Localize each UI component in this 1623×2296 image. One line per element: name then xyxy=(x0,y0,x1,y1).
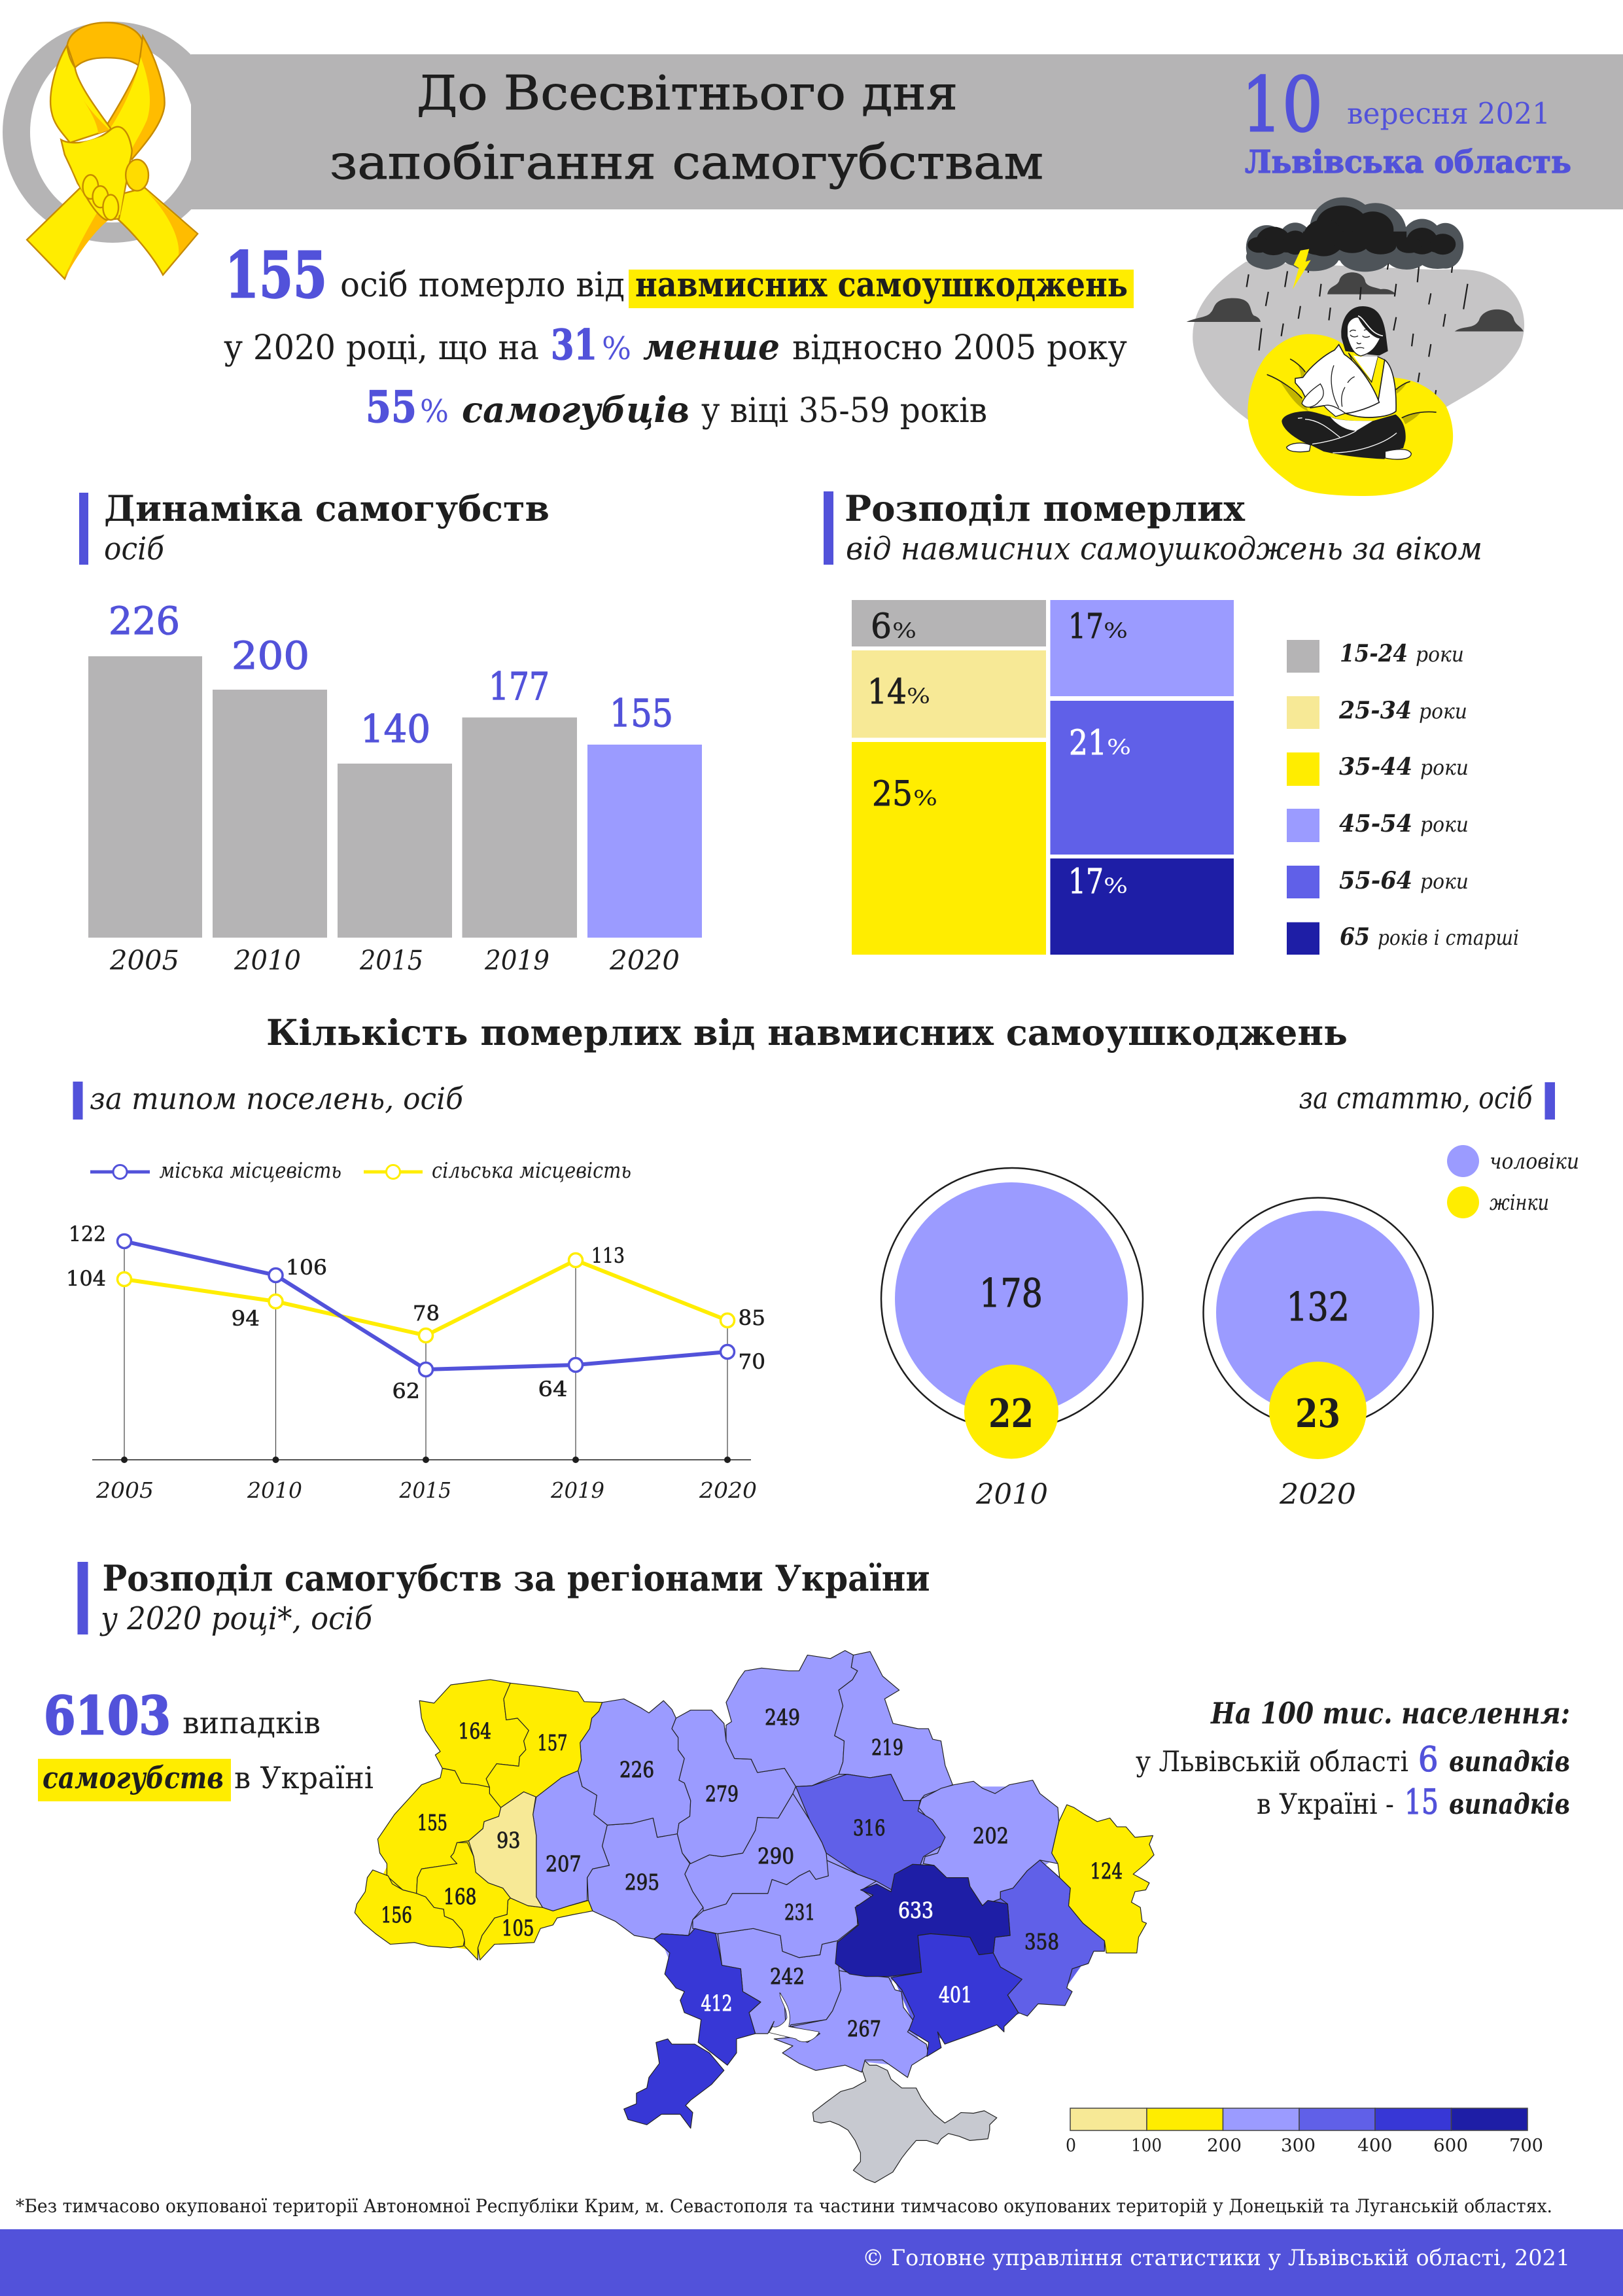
subheading: by sex: за статтю, осіб xyxy=(1299,1080,1533,1116)
age legend: роки xyxy=(1416,642,1464,667)
region: Zakarpattia xyxy=(355,1870,464,1948)
bar 2019: 2019 xyxy=(484,945,550,976)
data labels: 78 xyxy=(413,1301,440,1326)
region: Khmelnytskyi xyxy=(533,1771,609,1911)
region value labels: 290 xyxy=(758,1843,794,1869)
age legend: 35-44 xyxy=(1339,753,1412,781)
intro statistics text: навмисних самоушкоджень xyxy=(635,265,1128,305)
year axis labels: 2010 xyxy=(247,1477,302,1503)
bubble chart: 2020: 2020 xyxy=(1279,1478,1356,1511)
section heading: number of deaths: Кількість померлих від навмисних самоушкоджень xyxy=(266,1012,1348,1053)
sex legend: жінки xyxy=(1490,1190,1549,1215)
section heading: regional distribution: у 2020 році*, осіб xyxy=(99,1600,373,1637)
region: Odesa xyxy=(624,1928,761,2128)
section heading: age distribution: від навмисних самоушкоджень за віком xyxy=(846,531,1482,567)
region value labels: 249 xyxy=(765,1704,800,1730)
per 100k callout: 15 xyxy=(1405,1783,1439,1822)
region: Kherson xyxy=(774,1971,928,2077)
region value labels: 105 xyxy=(502,1915,534,1941)
year axis labels: 2015 xyxy=(399,1477,451,1503)
tile 25-34: 14 xyxy=(867,673,907,712)
region value labels: 168 xyxy=(444,1884,476,1909)
tile 15-24: 6 xyxy=(871,607,892,646)
region value labels: 401 xyxy=(939,1982,972,2007)
intro statistics text: у віці 35-59 років xyxy=(701,391,987,431)
tile 25-34: % xyxy=(907,684,930,709)
bar 2020 xyxy=(587,691,702,976)
region: Volyn xyxy=(419,1680,529,1787)
region value labels: 207 xyxy=(546,1851,581,1877)
intro statistics text: 31 xyxy=(551,321,597,370)
region: Dnipropetrovsk xyxy=(835,1864,1010,1977)
tile 65+: % xyxy=(1104,874,1128,898)
map colour scale legend: 100 xyxy=(1131,2136,1162,2156)
rain xyxy=(1247,257,1467,397)
section heading: suicide dynamics: осіб xyxy=(104,531,165,567)
region value labels: 412 xyxy=(701,1990,733,2016)
bar 2005: 226 xyxy=(109,599,180,643)
intro statistics text: 55 xyxy=(366,381,417,433)
per 100k callout: На 100 тис. населення: xyxy=(1210,1696,1570,1731)
region: Zaporizhzhia xyxy=(891,1934,1022,2057)
map colour scale legend: 400 xyxy=(1357,2136,1392,2156)
data labels: 104 xyxy=(66,1266,106,1291)
tile 35-44 xyxy=(852,742,1046,955)
tile 35-44: % xyxy=(913,786,937,811)
intro statistics text: 155 xyxy=(225,238,327,312)
intro statistics text: осіб померло від xyxy=(340,266,625,305)
bar chart: suicides by year xyxy=(88,599,702,976)
title: запобігання самогубствам xyxy=(330,135,1043,190)
footer bar xyxy=(0,2229,1623,2296)
treemap: deaths by age xyxy=(852,600,1234,955)
age legend: 65 xyxy=(1340,923,1370,951)
tile 35-44: 25 xyxy=(872,775,913,814)
section heading: regional distribution xyxy=(77,1557,930,1637)
intro statistics text: відносно 2005 року xyxy=(792,328,1127,368)
region value labels: 267 xyxy=(847,2016,881,2041)
tile 45-54: % xyxy=(1104,618,1128,643)
bubble chart: 2020 xyxy=(1204,1197,1433,1511)
intro statistics text: самогубців xyxy=(462,389,689,431)
national total callout xyxy=(38,1685,374,1801)
data labels xyxy=(66,1222,765,1404)
region: Chernivtsi xyxy=(478,1898,593,1960)
age legend: роки xyxy=(1420,812,1469,837)
section heading: suicide dynamics: Динаміка самогубств xyxy=(104,487,550,529)
region value labels: 124 xyxy=(1090,1858,1123,1884)
tile 55-64 xyxy=(1051,701,1234,855)
region: Donetsk xyxy=(993,1860,1104,2016)
region value labels: 295 xyxy=(625,1869,659,1895)
bar 2015 xyxy=(338,707,452,976)
map colour scale legend: 300 xyxy=(1281,2136,1316,2156)
per 100k callout: 6 xyxy=(1418,1740,1438,1780)
data labels: 85 xyxy=(738,1305,765,1330)
section heading: age distribution: Розподіл померлих xyxy=(845,487,1246,529)
map colour scale legend: 200 xyxy=(1207,2136,1242,2156)
data labels: 122 xyxy=(69,1222,106,1246)
age legend: 55-64 xyxy=(1339,867,1412,894)
age legend: 15-24 xyxy=(1340,640,1408,667)
region value labels: 242 xyxy=(770,1964,805,1989)
map colour scale legend: 600 xyxy=(1433,2136,1468,2156)
line chart: urban vs rural deaths xyxy=(66,1222,765,1503)
bar 2015: 140 xyxy=(360,707,430,751)
tile 65+ xyxy=(1051,858,1234,955)
region value labels: 358 xyxy=(1024,1929,1059,1954)
rural line xyxy=(118,1254,734,1343)
intro statistics text: % xyxy=(602,330,631,367)
footnote: *Без тимчасово окупованої території Автономної Республіки Крим, м. Севастополя та частини тимчасово окупованих територій у Донецькій та Луганській областях. xyxy=(16,2195,1552,2217)
region value labels: 156 xyxy=(381,1902,412,1928)
bar 2010: 2010 xyxy=(234,945,301,976)
region: Kharkiv xyxy=(918,1780,1059,1905)
age legend xyxy=(1287,640,1519,955)
year axis labels: 2020 xyxy=(699,1477,757,1503)
bar 2005: 2005 xyxy=(109,945,179,976)
footer bar: © Головне управління статистики у Львівській області, 2021 xyxy=(862,2245,1570,2271)
bar 2010: 200 xyxy=(232,633,309,678)
region value labels: 231 xyxy=(784,1899,815,1925)
sex legend: чоловіки xyxy=(1490,1148,1579,1174)
bar 2015: 2015 xyxy=(359,945,423,976)
title: До Всесвітнього дня xyxy=(417,65,958,120)
map underlay closing gaps between regions xyxy=(365,1664,1096,2065)
tile 45-54 xyxy=(1051,600,1234,696)
tile 55-64: 21 xyxy=(1069,724,1107,763)
subheading: by settlement type: за типом поселень, осіб xyxy=(90,1081,464,1116)
bar 2019 xyxy=(462,664,577,976)
national total callout: випадків xyxy=(183,1705,321,1740)
per 100k callout: у Львівській області xyxy=(1136,1746,1408,1778)
tile 25-34 xyxy=(852,650,1046,738)
region: Rivne xyxy=(486,1683,602,1807)
date and region xyxy=(1242,62,1571,181)
age legend: 25-34 xyxy=(1338,697,1412,724)
bar 2020: 2020 xyxy=(609,945,680,976)
storm cloud xyxy=(1246,197,1463,272)
region: Crimea xyxy=(812,2060,997,2183)
tile 55-64: % xyxy=(1107,735,1131,760)
region value labels: 202 xyxy=(973,1823,1009,1848)
illustration: woman under storm cloud xyxy=(1187,197,1524,496)
bar 2005 xyxy=(88,599,202,976)
age legend: 45-54 xyxy=(1339,810,1412,838)
region value labels: 219 xyxy=(871,1735,903,1760)
data labels: 106 xyxy=(286,1255,327,1280)
section heading: suicide dynamics xyxy=(79,487,550,567)
tile 65+: 17 xyxy=(1068,862,1104,902)
region value labels: 155 xyxy=(417,1810,447,1835)
tile 15-24: % xyxy=(892,618,916,643)
region: Lviv xyxy=(377,1768,501,1894)
map colour scale legend xyxy=(1066,2108,1543,2156)
tile 45-54: 17 xyxy=(1068,607,1104,646)
line chart legend: сільська місцевість xyxy=(432,1157,631,1183)
national total callout: в Україні xyxy=(234,1760,374,1795)
region: Vinnytsia xyxy=(587,1818,703,1939)
bar 2019: 177 xyxy=(489,664,550,709)
small background clouds xyxy=(1187,272,1524,332)
title xyxy=(330,65,1043,190)
intro statistics text xyxy=(224,238,1134,433)
intro statistics text: у 2020 році, що на xyxy=(224,328,539,368)
line chart legend xyxy=(90,1157,631,1183)
map colour scale legend: 700 xyxy=(1509,2136,1543,2156)
region value labels: 157 xyxy=(538,1730,568,1756)
bubble chart: 2020: 23 xyxy=(1295,1391,1340,1437)
data labels: 70 xyxy=(738,1349,765,1374)
bubble chart: 2010: 2010 xyxy=(975,1478,1048,1511)
date and region: Львівська область xyxy=(1245,144,1571,181)
Dnipro estuary xyxy=(769,1992,819,2041)
bubble chart: 2010 xyxy=(881,1168,1143,1511)
highlight: intentional self-harm xyxy=(629,270,1134,308)
year axis labels: 2005 xyxy=(96,1477,154,1503)
data labels: 113 xyxy=(591,1243,625,1268)
region: Mykolaiv xyxy=(718,1928,841,2034)
per 100k callout: випадків xyxy=(1449,1746,1570,1778)
leaf shadows and strokes xyxy=(1279,363,1421,424)
region: Cherkasy xyxy=(685,1793,828,1911)
header banner xyxy=(191,54,1623,209)
data labels: 62 xyxy=(393,1379,420,1404)
year axis labels: 2019 xyxy=(550,1477,604,1503)
region: Zhytomyr xyxy=(578,1699,691,1837)
date and region: вересня 2021 xyxy=(1347,96,1550,131)
region value labels: 226 xyxy=(620,1757,654,1782)
region value labels xyxy=(381,1704,1123,2041)
lightning bolt xyxy=(1293,249,1311,289)
date and region: 10 xyxy=(1242,62,1323,149)
age legend: роки xyxy=(1420,869,1469,894)
region value labels: 93 xyxy=(497,1828,521,1853)
region: Poltava xyxy=(795,1775,945,1890)
year axis labels xyxy=(96,1477,757,1503)
region: Ivano-Frankivsk xyxy=(417,1843,510,1960)
section heading: age distribution xyxy=(824,487,1482,567)
bar 2020: 155 xyxy=(610,691,673,735)
per 100k callout xyxy=(1136,1696,1570,1822)
region value labels: 279 xyxy=(705,1781,739,1807)
map of Ukraine by region xyxy=(355,1650,1154,2183)
intro statistics text: менше xyxy=(643,326,780,368)
icon: grey ring behind ribbon xyxy=(3,22,222,243)
yellow blob xyxy=(1248,334,1453,496)
per 100k callout: в Україні - xyxy=(1257,1788,1394,1821)
sex legend xyxy=(1447,1145,1579,1218)
age legend: роки xyxy=(1419,699,1467,724)
icon: yellow ribbon with hands xyxy=(27,22,198,279)
region: Kyiv xyxy=(672,1710,795,1863)
per 100k callout: випадків xyxy=(1449,1788,1570,1821)
region: Luhansk xyxy=(1052,1805,1154,1953)
section heading: regional distribution: Розподіл самогубств за регіонами України xyxy=(102,1557,930,1599)
region: Chernihiv xyxy=(726,1650,858,1786)
map colour scale legend: 0 xyxy=(1066,2136,1076,2156)
bubble chart: 2010: 22 xyxy=(988,1391,1034,1437)
region: Sumy xyxy=(835,1651,952,1801)
region value labels: 316 xyxy=(853,1815,886,1841)
region: Ternopil xyxy=(468,1792,542,1907)
urban line xyxy=(118,1234,734,1377)
tile 15-24 xyxy=(852,600,1046,646)
line chart legend: міська місцевість xyxy=(160,1157,341,1183)
data labels: 64 xyxy=(538,1377,568,1402)
age legend: роки xyxy=(1420,755,1469,780)
region: Kirovohrad xyxy=(693,1860,877,1958)
woman xyxy=(1282,306,1411,459)
intro statistics text: % xyxy=(420,393,449,430)
bubble chart: 2010: 178 xyxy=(979,1271,1043,1316)
region value labels: 633 xyxy=(898,1898,934,1923)
national total callout: самогубств xyxy=(43,1760,224,1795)
national total callout: 6103 xyxy=(44,1685,171,1746)
data labels: 94 xyxy=(232,1306,260,1331)
region value labels: 164 xyxy=(458,1718,491,1744)
bar 2010 xyxy=(213,633,327,976)
age legend: років і старші xyxy=(1378,925,1519,950)
bubble chart: 2020: 132 xyxy=(1286,1284,1350,1330)
